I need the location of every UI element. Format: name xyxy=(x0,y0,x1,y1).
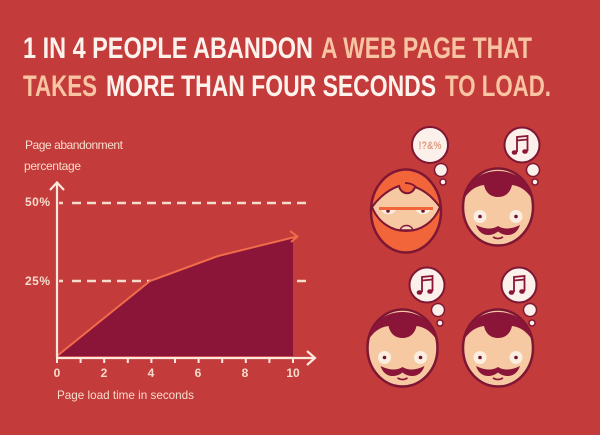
x axis title: Page load time in seconds xyxy=(57,388,194,402)
bearded man xyxy=(371,170,441,252)
x axis labels: 0 xyxy=(54,366,61,380)
dashed line 25% xyxy=(59,280,310,282)
eyes xyxy=(380,209,431,214)
area under curve xyxy=(58,237,293,356)
y axis xyxy=(50,182,64,358)
mouth xyxy=(400,226,413,230)
title xyxy=(23,32,551,103)
x axis xyxy=(56,351,315,365)
y axis labels: 50% xyxy=(25,195,50,209)
man 2 xyxy=(463,168,533,246)
man 4 xyxy=(463,310,533,386)
thought bubble: music 3 xyxy=(410,268,444,326)
x axis ticks xyxy=(57,358,293,363)
thought bubble: swearing xyxy=(412,127,448,185)
x axis labels: 2 xyxy=(101,366,108,380)
brow xyxy=(379,207,433,210)
title: MORE THAN FOUR SECONDS xyxy=(106,70,436,103)
title: A WEB PAGE THAT xyxy=(321,32,532,65)
dashed line 50% xyxy=(59,202,310,204)
hair curl xyxy=(405,183,416,187)
man 3 xyxy=(368,310,438,386)
title: TAKES xyxy=(23,70,97,103)
trend line with arrow xyxy=(57,231,298,356)
thought bubble: music 2 xyxy=(504,128,540,185)
x axis labels: 8 xyxy=(242,366,249,380)
thought bubble: music 4 xyxy=(502,268,536,326)
y axis title: percentage xyxy=(24,159,81,173)
y axis labels: 25% xyxy=(25,274,50,288)
x axis labels: 6 xyxy=(195,366,202,380)
chart: page abandonment vs load time xyxy=(24,138,315,402)
title: 1 IN 4 PEOPLE ABANDON xyxy=(23,32,313,65)
y axis title: Page abandonment xyxy=(25,138,124,152)
title: TO LOAD. xyxy=(445,70,551,103)
x axis labels: 10 xyxy=(286,366,300,380)
x axis labels: 4 xyxy=(148,366,155,380)
face xyxy=(371,170,441,252)
thought bubble: swearing: !?&% xyxy=(418,140,442,152)
